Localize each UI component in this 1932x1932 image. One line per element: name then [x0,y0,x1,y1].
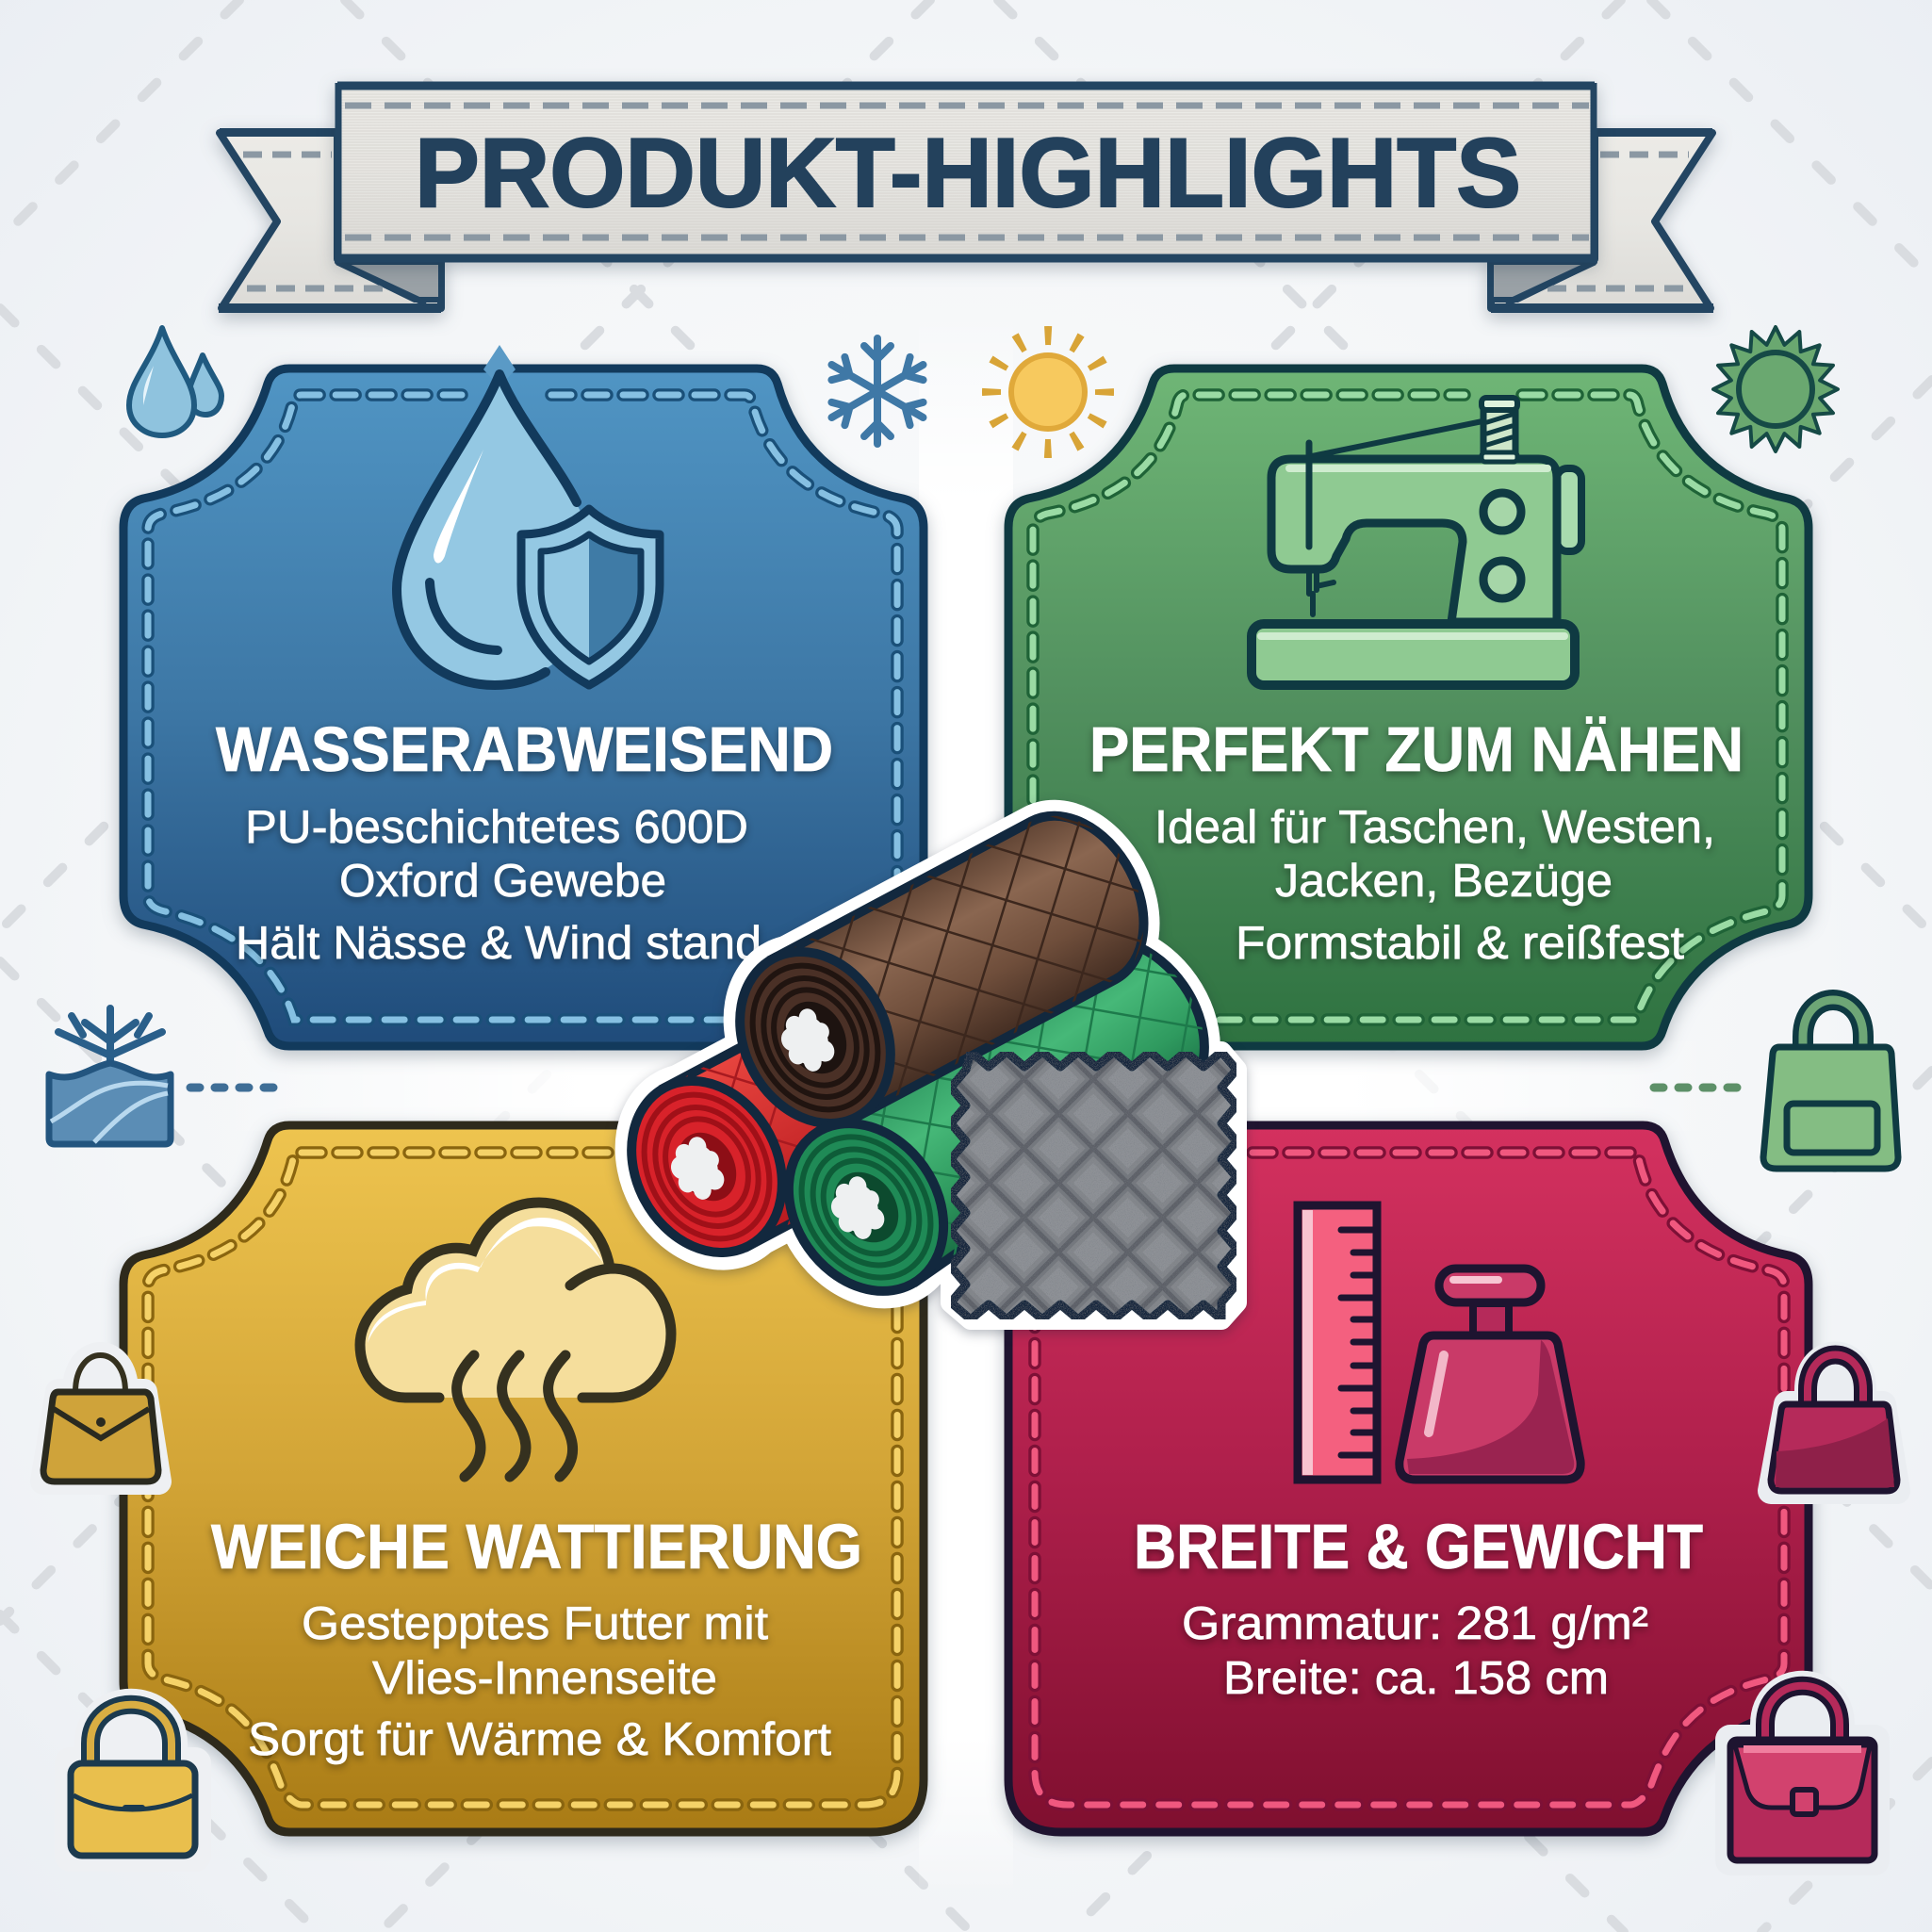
stitching yellow [148,1153,897,1805]
icon: sun [991,336,1105,449]
dotted connector left [190,1084,287,1091]
icon: water drop with shield [397,345,660,685]
brown roll wadding core [775,1005,839,1077]
green fabric roll end [757,1093,975,1321]
text: naehen details: Ideal für Taschen, Westen, [1154,802,1715,853]
icon: snowy landscape [49,1008,171,1144]
stitching red [1035,1153,1784,1805]
heading: perfekt zum naehen: PERFEKT ZUM NÄHEN [1089,714,1744,785]
panel background blue [123,368,924,1046]
grey quilted swatch [951,1052,1236,1319]
panel: perfekt zum naehen [1008,368,1809,1046]
text: wasserabweisend details: PU-beschichtetes 600D [245,802,748,853]
text: breite und gewicht details: Breite: ca. 158 cm [1223,1653,1609,1704]
banner right tail [1491,128,1713,313]
panel background red [1008,1125,1809,1832]
green roll wadding core [825,1172,889,1245]
panel: breite und gewicht [1008,1125,1809,1832]
dotted connector right [1654,1084,1751,1091]
text: naehen details: Jacken, Bezüge [1275,856,1613,907]
heading: weiche wattierung: WEICHE WATTIERUNG [211,1512,862,1582]
text: wasserabweisend details: Oxford Gewebe [339,856,666,907]
icon: green bag [1763,1000,1898,1169]
panel: weiche wattierung [123,1125,924,1832]
brown fabric roll [711,792,1171,1150]
red fabric roll body [664,991,932,1246]
text: wattierung details: Gestepptes Futter mit [302,1598,768,1649]
icon: ruler [1298,1205,1377,1480]
icon: large yellow bag [71,1705,195,1856]
icon: large red bag [1730,1686,1875,1860]
text: breite und gewicht details [1182,1598,1648,1704]
text: wasserabweisend details: Hält Nässe & Wind stand [236,918,761,969]
title banner [219,83,1713,313]
icon: water droplets [129,328,221,435]
red fabric roll end [602,1055,811,1279]
text: wattierung details: Sorgt für Wärme & Komfort [248,1714,831,1765]
title text: PRODUKT-HIGHLIGHTS [415,119,1521,228]
icon: snowflake [826,338,929,444]
panel: wasserabweisend [123,345,924,1046]
text: wattierung details: Vlies-Innenseite [372,1653,717,1704]
text: wasserabweisend details [236,802,761,969]
fabric rolls sticker [601,790,1236,1322]
text: wattierung details [248,1598,831,1765]
red roll wadding core [664,1133,729,1205]
icon: small yellow bag [43,1355,158,1482]
icon: sewing machine [1252,398,1581,685]
panel background green [1008,368,1809,1046]
banner left tail [219,128,441,313]
panel background yellow [123,1125,924,1832]
stitching blue [148,395,897,1020]
sticker white outline [601,790,1236,1322]
icon: green sun badge [1713,327,1838,451]
text: naehen details [1154,802,1715,969]
icon: steaming cloud [360,1203,671,1477]
text: breite und gewicht details: Grammatur: 281 g/m² [1182,1598,1648,1649]
heading: wasserabweisend: WASSERABWEISEND [216,714,833,785]
stitching green [1033,395,1782,1020]
icon: small red bag [1771,1355,1897,1491]
banner main ribbon [337,83,1595,263]
text: naehen details: Formstabil & reißfest [1236,918,1684,969]
icon: weight [1400,1269,1580,1480]
heading: breite und gewicht: BREITE & GEWICHT [1134,1512,1703,1582]
green fabric roll body [815,911,1235,1281]
